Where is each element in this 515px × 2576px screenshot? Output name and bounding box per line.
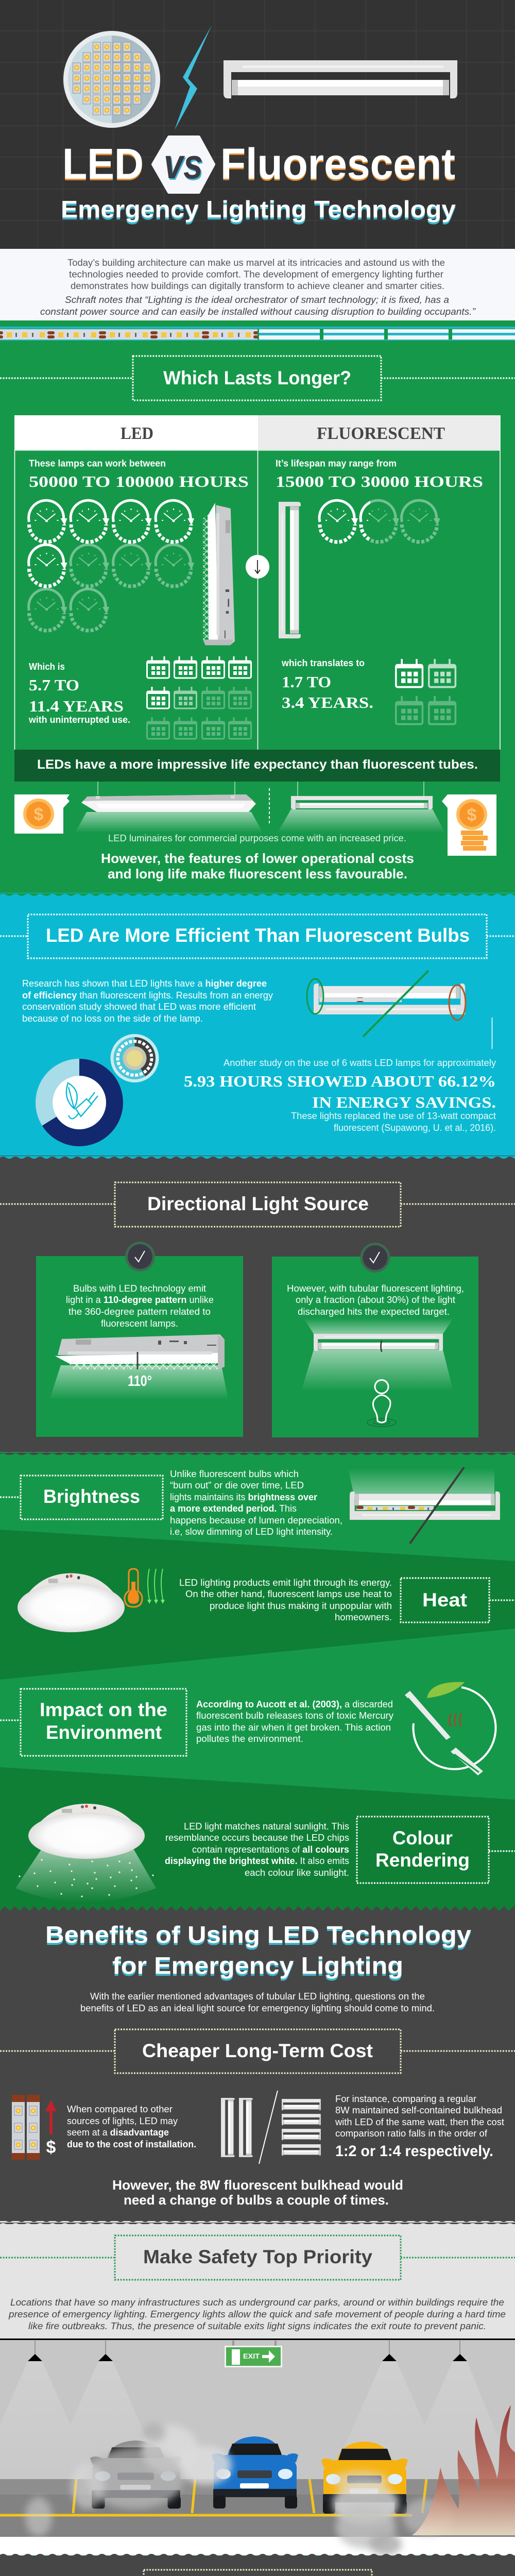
panel: introduction: technologies needed to provide comfort. The development of emergency lighting further [69,269,443,279]
panel: introduction: Schraft notes that “Lighting is the ideal orchestrator of smart technology; it is fixed, has a [65,295,449,305]
title: LED vs Fluorescent: Fluorescent [220,141,455,190]
text: cost comparison ratio [335,2094,504,2160]
text: fluorescent years: 1.7 TO [282,673,331,691]
panel: comparison table [14,415,500,782]
text: safety paragraph [8,2297,506,2331]
illustration: fire [412,2405,515,2535]
block: brightness: Brightness [43,1486,140,1507]
text: price note: However, the features of lower operational costs [101,851,414,866]
panel: LED directional card [36,1242,243,1437]
block: impact on the environment: Environment [46,1722,162,1743]
block: impact on the environment: fluorescent bulb releases tons of toxic Mercury [196,1710,393,1721]
block: heat [18,1569,515,1632]
text: cost comparison ratio: 8W maintained self-contained bulkhead [335,2105,502,2115]
panel: LED directional card: Bulbs with LED technology emit [73,1283,206,1294]
text: energy savings [184,1058,496,1133]
icon: single coin price tag [14,794,70,834]
text: efficiency research: Research has shown that LED lights have a higher degree [22,978,267,989]
block: brightness: a more extended period. This [170,1503,297,1514]
text: disadvantage: due to the cost of installation. [67,2139,196,2149]
panel: introduction [0,249,515,320]
block: heat: Heat [422,1589,467,1611]
text: LED years: Which is [29,662,65,672]
heading: Directional Light Source [0,1182,515,1227]
block: colour rendering: displaying the brightest white. It also emits [165,1856,349,1866]
heading: benefits of using LED technology: Benefits of Using LED Technology [45,1921,471,1948]
icon: fluorescent fixture [224,60,457,98]
heading: benefits of using LED technology: for Emergency Lighting [112,1954,403,1981]
block: brightness: happens because of lumen depreciation, [170,1515,342,1526]
icon: yellow car [321,2442,408,2514]
subtitle: Emergency Lighting Technology: Emergency Lighting Technology [61,198,456,225]
panel: introduction: constant power source and can easily be installed without causing disruption to building occupants.” [40,307,476,317]
icon: two LED lamps versus four fluorescent lamps [221,2091,321,2164]
block: impact on the environment: Impact on the [40,1699,167,1720]
text: safety paragraph: presence of emergency lighting. Emergency lights allow the quick and safe movement of people during a hard time [8,2309,506,2319]
text: fluorescent years [281,658,373,711]
callout: bulb change: However, the 8W fluorescent bulkhead would [112,2177,403,2193]
text: benefits intro: With the earlier mentioned advantages of tubular LED lighting, questions on the [90,1991,425,2002]
block: impact on the environment: pollutes the environment. [196,1734,303,1744]
heading: benefits of using LED technology: for Emergency Lighting [112,1952,403,1979]
panel: efficiency section [0,893,515,1159]
text: disadvantage [67,2104,196,2149]
text: LED years: with uninterrupted use. [28,715,130,725]
illustration: smoke [25,2424,452,2555]
icons: fluorescent calendars [396,659,455,724]
text: price note [101,833,414,882]
heading: safety [0,2235,515,2280]
text: disadvantage: sources of lights, LED may [67,2116,178,2126]
title: LED vs Fluorescent: vs [164,141,203,188]
panel: fluorescent directional card: However, with tubular fluorescent lighting, [287,1283,464,1294]
panel: directional light section [0,1156,515,1455]
text: cost comparison ratio: with LED of the same watt, then the cost [335,2117,504,2127]
image: vertical fluorescent fixture [279,502,301,638]
panel: introduction: Today’s building architecture can make us marvel at its intricacies and astound us with the [67,258,445,268]
title: LED vs Fluorescent: LED [62,141,144,190]
heading: Which Lasts Longer?: Which Lasts Longer? [163,367,351,388]
illustration: car park with smoke and fire [0,2338,515,2555]
panel: comparison table: FLUORESCENT [317,424,445,443]
text: efficiency research [22,978,273,1024]
icon: stacked coins price tag [442,794,496,856]
icons: ceiling lights [0,2340,515,2479]
icon: single coin price tag: $ [34,805,44,824]
text: disadvantage: seem at a disadvantage [67,2127,169,2138]
icon: broken tube with leaf [405,1682,496,1775]
heading: Directional Light Source: Directional Light Source [147,1193,369,1214]
icon: exit sign: EXIT [243,2352,260,2360]
icon: down arrow [246,555,269,579]
text: LED lifespan: 50000 TO 100000 HOURS [29,472,249,490]
text: disadvantage: When compared to other [67,2104,173,2114]
block: brightness: lights maintains its brightness over [170,1492,317,1502]
panel: make safety top priority [0,2221,515,2555]
text: price note: and long life make fluorescent less favourable. [108,866,407,882]
text: safety paragraph: Locations that have so many infrastructures such as underground car parks, around or within buildings require the [10,2297,504,2308]
panel: introduction: demonstrates how buildings can digitally transform to achieve cleaner and smarter cities. [71,281,444,291]
block: colour rendering: Colour [392,1827,453,1849]
icon: exit sign [225,2341,282,2367]
text: efficiency research: because of no loss on the side of the lamp. [22,1013,203,1024]
heading: benefits of using LED technology [45,1921,471,1981]
text: LED lifespan [29,459,249,490]
text: energy savings: fluorescent (Supawong, U. et al., 2016). [334,1123,496,1133]
chart: 66 percent donut with energy icon [44,1067,114,1138]
panel: LED directional card: fluorescent lamps. [101,1318,178,1329]
block: colour rendering: LED light matches natural sunlight. This [184,1821,349,1832]
text: energy savings: IN ENERGY SAVINGS. [312,1093,496,1111]
block: impact on the environment [0,1682,496,1775]
image: hanging fluorescent fixture [278,782,445,833]
title: LED vs Fluorescent [62,137,455,192]
icons: LED calendars [147,656,251,739]
heading: cheaper long-term cost: Cheaper Long-Term Cost [142,2040,373,2061]
block: heat: LED lighting products emit light through its energy. [179,1578,392,1588]
text: fluorescent years: which translates to [281,658,365,668]
heading: cheaper long-term cost [0,2029,515,2073]
subtitle: Emergency Lighting Technology: Emergency Lighting Technology [61,196,456,223]
text: fluorescent years: 3.4 YEARS. [282,693,373,711]
image: tube with LED strip and no-loss markers [307,971,466,1037]
block: brightness: “burn out” or die over time, LED [170,1480,304,1490]
text: efficiency research: of efficiency than fluorescent lights. Results from an energy [22,990,273,1001]
panel: LED directional card: the 360-degree pattern related to [68,1307,211,1317]
icons: fluorescent clocks [319,500,440,542]
icon: LED strips with rising cost: $ [46,2138,56,2157]
icons: LED clocks [29,500,194,631]
text: fluorescent lifespan: 15000 TO 30000 HOURS [276,472,483,490]
heading: safety: Make Safety Top Priority [143,2246,372,2267]
block: colour rendering: each colour like sunlight. [245,1868,349,1878]
panel: fluorescent directional card: discharged hits the expected target. [298,1307,450,1317]
icon: LED strips with rising cost [12,2095,57,2160]
panel: properties section [0,1452,515,1911]
block: colour rendering: contain representations of all colours [192,1844,349,1855]
text: efficiency research: conservation study showed that LED was more efficient [22,1002,256,1012]
header: dark hero background [0,0,515,249]
text: LED years: 11.4 YEARS [29,697,124,715]
text: energy savings: Another study on the use of 6 watts LED lamps for approximately [224,1058,496,1068]
heading: provide light quality [0,2570,515,2576]
panel: LED directional card: 110° [128,1373,152,1389]
text: safety paragraph: like fire outbreaks. Thus, the presence of suitable exits light signs indicates the exit route to prevent panic. [28,2321,486,2331]
block: brightness: i.e, slow dimming of LED light intensity. [170,1527,333,1537]
callout: bulb change: need a change of bulbs a couple of times. [124,2192,389,2208]
image: tube with strip and slash [348,1467,500,1544]
panel: which lasts longer section [0,320,515,896]
icon: LED chip panel [63,31,160,128]
title: LED vs Fluorescent: Fluorescent [220,140,455,188]
block: impact on the environment: gas into the air when it get broken. This action [196,1722,391,1733]
title: LED vs Fluorescent: LED [62,140,144,188]
icon: thermometer [125,1569,142,1607]
block: heat: On the other hand, fluorescent lamps use heat to [185,1589,392,1599]
text: price note: LED luminaires for commercial purposes come with an increased price. [108,833,406,843]
title: LED vs Fluorescent: vs [165,142,204,189]
icon: gray car [90,2441,182,2509]
text: LED years: 5.7 TO [29,676,79,694]
text: energy savings: 5.93 HOURS SHOWED ABOUT 66.12% [184,1072,496,1090]
callout: bulb change [112,2177,403,2208]
text: fluorescent lifespan: It’s lifespan may range from [276,459,397,469]
panel: fluorescent directional card: only a fraction (about 30%) of the light [296,1295,455,1305]
heading: benefits of using LED technology: Benefits of Using LED Technology [45,1923,471,1950]
text: benefits intro: benefits of LED as an ideal light source for emergency lighting should come to mind. [80,2003,435,2013]
icon: blue car [212,2436,298,2509]
heading: Which Lasts Longer? [0,356,515,400]
block: colour rendering: Rendering [375,1850,470,1871]
block: heat: produce light thus making it unpopular with [210,1601,392,1611]
heading: LED are more efficient [0,914,515,958]
panel: comparison table: LED [121,424,153,443]
block: colour rendering [15,1804,515,1902]
heading: LED are more efficient: LED Are More Efficient Than Fluorescent Bulbs [46,925,470,946]
icon: light dots [19,1859,154,1897]
panel: LED directional card: light in a 110-degree pattern unlike [66,1295,214,1305]
icon: clock badge with LED panel [110,1034,159,1082]
panel: fluorescent directional card [272,1243,478,1437]
strip: LED and fluorescent divider [0,327,515,341]
text: cost comparison ratio: comparison ratio falls in the order of [335,2128,488,2139]
block: brightness [0,1469,342,1537]
callout: life expectancy [14,750,500,782]
block: impact on the environment: According to Aucott et al. (2003), a discarded [196,1699,393,1709]
icon: stacked coins price tag: $ [467,805,477,825]
icon: heat waves [147,1569,165,1604]
icon: lightning bolt divider [175,25,212,130]
text: fluorescent lifespan [276,459,483,490]
panel: benefits for emergency lighting [0,1906,515,2224]
block: brightness: Unlike fluorescent bulbs which [170,1469,299,1479]
text: benefits intro [80,1991,435,2013]
callout: life expectancy: LEDs have a more impressive life expectancy than fluorescent tubes. [37,757,478,772]
parking lines [0,2479,426,2515]
text: energy savings: These lights replaced the use of 13-watt compact [291,1111,496,1121]
block: heat: homeowners. [335,1612,392,1622]
text: LED lifespan: These lamps can work between [29,459,166,469]
panel: provide light quality [0,2553,515,2576]
text: cost comparison ratio: For instance, comparing a regular [335,2094,476,2104]
text: cost comparison ratio: 1:2 or 1:4 respectively. [335,2143,493,2160]
text: LED years [28,662,130,725]
icon: person target [367,1380,396,1427]
image: hanging LED luminaire [75,782,263,833]
block: colour rendering: resemblance occurs because the LED chips [165,1833,349,1843]
image: vertical LED batten [203,503,235,645]
